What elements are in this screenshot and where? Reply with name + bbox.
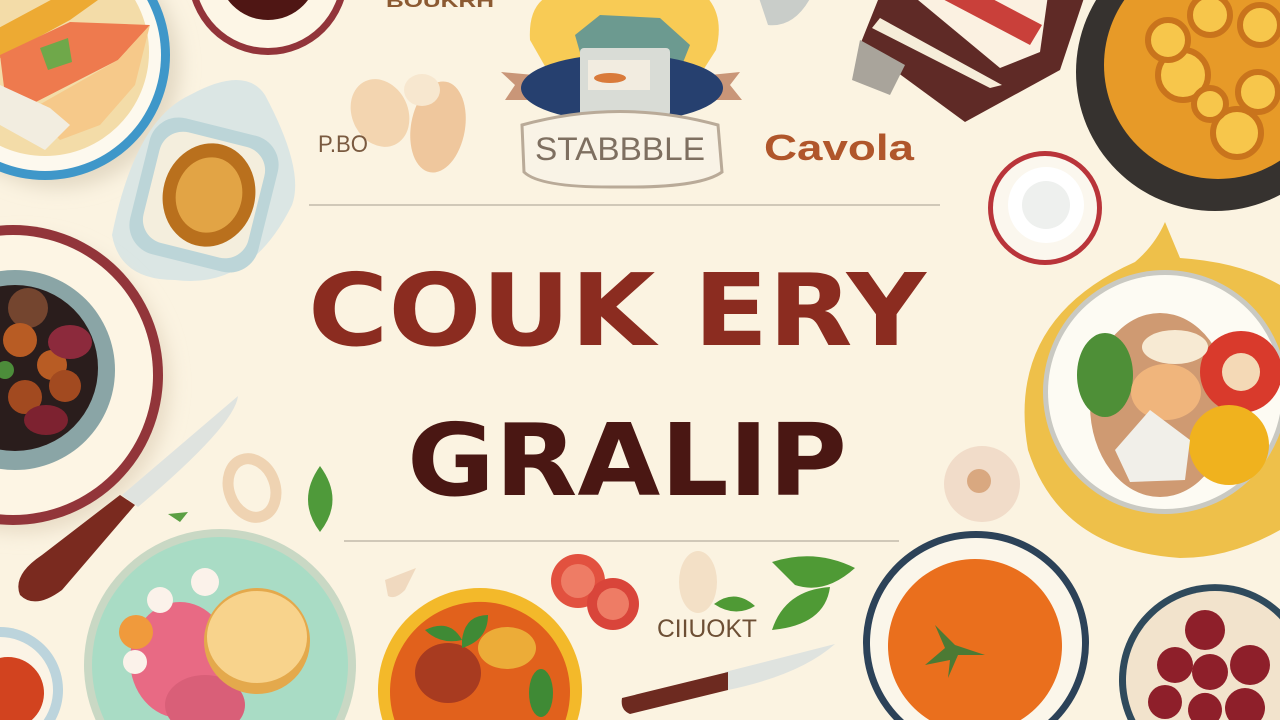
bowl: tomato soup [863, 531, 1089, 720]
icon: garlic bulbs [340, 69, 473, 177]
bowl: top-centre-left dark sauce [188, 0, 348, 55]
title line 2: GRALIP [407, 402, 847, 519]
icon: knife left [18, 396, 238, 601]
tray: top-right striped food [852, 0, 1085, 122]
bowl: red berries [1119, 584, 1280, 720]
label: left small text: P.BO [318, 131, 368, 158]
plate: left meat bowl [0, 225, 170, 533]
plate: right mixed vegetables [1025, 222, 1280, 558]
garnish: tomato slices [551, 554, 639, 630]
garnish: radish slice [944, 446, 1020, 522]
title line 1: COUK ERY [308, 252, 928, 369]
plate: bottom-left pink and bun [84, 529, 356, 720]
emblem: central pot logo [501, 0, 742, 187]
onion ring [220, 452, 284, 524]
spoon top [758, 0, 812, 25]
bowl: orange curry [378, 588, 582, 720]
small dish: golden food [112, 80, 295, 281]
divider top [309, 204, 940, 206]
label: right script text: Cavola [764, 127, 915, 168]
bowl: bottom-left corner [0, 627, 63, 720]
plate: top-left salmon dish [0, 0, 180, 188]
garnish: mushroom small [385, 568, 416, 597]
label: bottom small text: CIIUOKT [657, 615, 757, 643]
emblem: central pot logo: STABBBLE [535, 131, 705, 167]
garnish: mushroom [679, 551, 717, 613]
divider bottom [344, 540, 899, 542]
icon: knife bottom [622, 644, 835, 714]
small cream bowl [988, 151, 1102, 265]
icon: green leaves [714, 556, 855, 630]
bowl: top-right noodles [1076, 0, 1280, 211]
icon: leaf [168, 466, 332, 532]
